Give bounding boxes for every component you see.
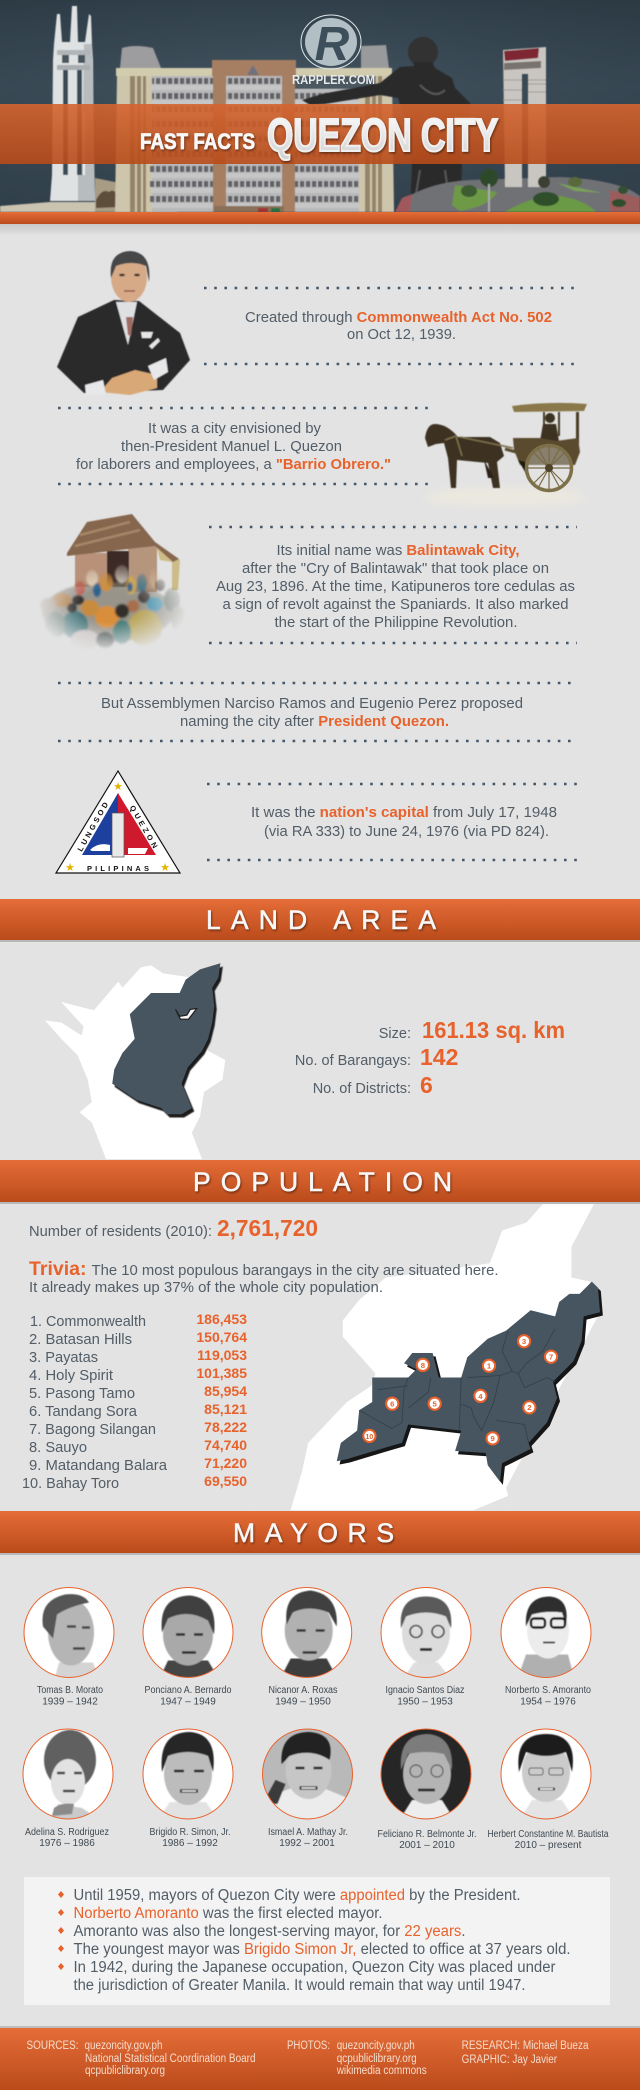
section banner: Mayors: MAYORS <box>233 1518 394 1548</box>
icon: Quezon City seal: LUNGSOD <box>76 800 110 853</box>
mayor names and terms: 2001 – 2010 <box>399 1840 455 1851</box>
text: Commonwealth Act <box>245 310 552 343</box>
footer: research and graphic credits: GRAPHIC: Jay Javier <box>462 2054 557 2066</box>
map markers 1–10: 4 <box>478 1392 483 1401</box>
text: Balintawak City: a sign of revolt against the Spaniards. It also marked <box>222 597 568 613</box>
text: nation's capital: It was the nation's capital from July 17, 1948 <box>251 805 557 821</box>
mayor names and terms: Feliciano R. Belmonte Jr. <box>378 1829 476 1840</box>
text: Barrio Obrero: It was a city envisioned by <box>148 421 322 437</box>
footer: sources: National Statistical Coordination Board <box>85 2053 256 2065</box>
list: top ten barangays: 85,121 <box>204 1401 247 1417</box>
map markers 1–10 <box>363 1335 557 1444</box>
icon: Quezon City seal: QUEZON <box>128 804 160 850</box>
mayor names and terms: 1986 – 1992 <box>162 1838 218 1849</box>
text: Balintawak City <box>216 543 575 631</box>
mayor portrait: Morato <box>24 1588 114 1678</box>
list: top ten barangays: 119,053 <box>197 1347 247 1363</box>
list: top ten barangays: 5. Pasong Tamo <box>29 1386 135 1402</box>
illustration: Manuel L. Quezon portrait <box>57 251 190 395</box>
list: top ten barangays: 69,550 <box>204 1473 247 1489</box>
mayor names and terms: 1950 – 1953 <box>397 1696 453 1708</box>
list: top ten barangays: 1. Commonwealth <box>30 1314 146 1330</box>
footer: photos: qcpubliclibrary.org <box>337 2053 417 2065</box>
footer: photos: PHOTOS: <box>287 2040 330 2052</box>
footer: research and graphic credits <box>462 2040 589 2066</box>
icon: Quezon City seal: ★ <box>113 781 123 793</box>
list: top ten barangays: 78,222 <box>204 1419 247 1435</box>
mayor portrait: Belmonte <box>381 1729 471 1819</box>
icon: Quezon City seal: ★ <box>160 862 170 874</box>
section banner: Population: POPULATION <box>193 1167 452 1197</box>
footer: photos: quezoncity.gov.ph <box>337 2040 415 2052</box>
text: trivia: It already makes up 37% of the whole city population. <box>29 1280 383 1296</box>
map markers 1–10: 6 <box>390 1400 395 1409</box>
land area stats: 6 <box>420 1072 433 1098</box>
mayor names and terms: 1976 – 1986 <box>39 1838 95 1849</box>
text: Balintawak City: Aug 23, 1896. At the time, Katipuneros tore cedulas as <box>216 579 575 595</box>
section banner: Population <box>0 1160 640 1204</box>
mayor names and terms: 1947 – 1949 <box>160 1696 216 1708</box>
land area stats: No. of Districts: <box>313 1081 411 1097</box>
text: Commonwealth Act: on Oct 12, 1939. <box>347 327 456 343</box>
panel: mayor trivia: Until 1959, mayors of Quezon City were appointed by the President. <box>74 1887 520 1904</box>
list: top ten barangays: 9. Matandang Balara <box>29 1458 168 1474</box>
land area stats: Size: <box>379 1026 411 1042</box>
header: skyline banner <box>0 0 640 212</box>
map: surrounding Metro Manila <box>45 965 225 1159</box>
mayor names and terms: Nicanor A. Roxas <box>268 1685 338 1696</box>
orange title band <box>0 104 640 164</box>
map: top ten barangays <box>337 1282 603 1485</box>
list: top ten barangays: 2. Batasan Hills <box>29 1332 132 1348</box>
panel: mayor trivia: The youngest mayor was Brigido Simon Jr, elected to office at 37 years old. <box>74 1941 570 1958</box>
list: top ten barangays: 71,220 <box>204 1455 247 1471</box>
map: Quezon City land area <box>45 963 225 1159</box>
list: top ten barangays: 150,764 <box>196 1329 247 1345</box>
map markers 1–10: 8 <box>421 1361 426 1370</box>
footer: photos: wikimedia commons <box>336 2065 427 2077</box>
illustration: Quezon Memorial Circle tower <box>0 6 178 212</box>
footer: sources: SOURCES: <box>26 2040 78 2052</box>
list: top ten barangays <box>22 1311 247 1492</box>
panel: mayor trivia: Amoranto was also the longest-serving mayor, for 22 years. <box>74 1923 466 1940</box>
list: top ten barangays: 4. Holy Spirit <box>29 1368 113 1384</box>
map: city outline <box>112 963 223 1118</box>
icon: Quezon City seal: PILIPINAS <box>87 864 149 873</box>
land area stats: 161.13 sq. km <box>422 1017 565 1043</box>
mayor names and terms: Herbert Constantine M. Bautista <box>488 1829 609 1840</box>
text: nation's capital: (via RA 333) to June 24, 1976 (via PD 824). <box>264 824 549 840</box>
text: trivia: Trivia: <box>29 1258 86 1280</box>
text: Commonwealth Act: Created through Commonwealth Act No. 502 <box>245 310 552 326</box>
mayor names and terms: 1992 – 2001 <box>279 1838 335 1849</box>
map markers 1–10: 5 <box>433 1400 438 1409</box>
list: top ten barangays: 3. Payatas <box>29 1350 98 1366</box>
text: number of residents: 2,761,720 <box>217 1215 318 1241</box>
mayor names and terms: 2010 – present <box>515 1840 582 1851</box>
illustration: Balintawak hut and crowd <box>40 514 185 650</box>
footer: photos <box>287 2040 427 2077</box>
mayor portrait: Bernardo <box>143 1588 233 1678</box>
land area stats <box>295 1017 565 1098</box>
section banner: Land Area <box>0 899 640 942</box>
mayor names and terms: Tomas B. Morato <box>37 1685 103 1696</box>
title: Quezon City: QUEZON CITY <box>267 109 498 161</box>
text: Barrio Obrero: for laborers and employees, a "Barrio Obrero." <box>76 457 391 473</box>
list: top ten barangays: 186,453 <box>196 1311 247 1327</box>
text: number of residents: Number of residents (2010): <box>29 1224 212 1240</box>
illustration: Quezon Circle arch and gardens <box>395 47 640 212</box>
footer: credits <box>0 2026 640 2090</box>
footer: research and graphic credits: RESEARCH: Michael Bueza <box>462 2040 589 2052</box>
icon: Quezon City seal <box>56 771 180 874</box>
text: naming after President Quezon: naming the city after President Quezon. <box>180 714 449 730</box>
text: Barrio Obrero: then-President Manuel L. Quezon <box>121 439 342 455</box>
icon: Rappler logo: R <box>315 18 350 71</box>
text: naming after President Quezon <box>101 696 523 730</box>
text: Balintawak City: Its initial name was Balintawak City, <box>276 543 520 559</box>
mayor names and terms: Adelina S. Rodriguez <box>25 1827 109 1838</box>
icon: Rappler logo <box>292 15 375 87</box>
mayor names and terms: Norberto S. Amoranto <box>505 1685 591 1696</box>
map markers 1–10: 7 <box>549 1353 553 1362</box>
text: nation's capital <box>251 805 557 840</box>
map markers 1–10: 1 <box>487 1362 492 1371</box>
list: top ten barangays: 101,385 <box>196 1365 247 1381</box>
panel: mayor trivia <box>24 1877 610 2005</box>
mayor portrait: Diaz <box>381 1588 471 1678</box>
mayor names and terms: Ignacio Santos Diaz <box>386 1685 464 1696</box>
map markers 1–10: 3 <box>522 1337 527 1346</box>
text: Balintawak City: the start of the Philippine Revolution. <box>274 615 518 631</box>
mayor names and terms: Ponciano A. Bernardo <box>144 1685 232 1696</box>
list: top ten barangays: 6. Tandang Sora <box>29 1404 138 1420</box>
map markers 1–10: 9 <box>490 1434 495 1443</box>
title: Fast Facts: FAST FACTS <box>140 129 255 154</box>
panel: mayor trivia: Norberto Amoranto was the first elected mayor. <box>74 1905 382 1922</box>
mayor portrait: Rodriguez <box>23 1729 113 1819</box>
header bottom bar <box>0 212 640 224</box>
text: trivia <box>29 1258 498 1296</box>
list: top ten barangays: 85,954 <box>204 1383 247 1399</box>
map: barangays on the city map <box>291 1204 603 1510</box>
section banner: Mayors <box>0 1511 640 1555</box>
text: number of residents <box>29 1215 318 1241</box>
icon: Rappler logo: RAPPLER.COM <box>292 72 375 87</box>
illustration: Quezon City Hall <box>115 45 394 212</box>
mayor names and terms: 1939 – 1942 <box>42 1696 98 1708</box>
list: top ten barangays: 8. Sauyo <box>29 1440 87 1456</box>
text: naming after President Quezon: But Assemblymen Narciso Ramos and Eugenio Perez proposed <box>101 696 523 712</box>
text: trivia: The 10 most populous barangays in the city are situated here. <box>92 1263 498 1279</box>
panel: mayor trivia: the jurisdiction of Greater Manila. It would remain that way until 1947. <box>74 1977 526 1994</box>
mayor names and terms: Brigido R. Simon, Jr. <box>150 1827 230 1838</box>
text: Balintawak City: after the "Cry of Balintawak" that took place on <box>242 561 549 577</box>
list: top ten barangays: 74,740 <box>204 1437 247 1453</box>
map markers 1–10: 2 <box>527 1403 532 1412</box>
footer: sources: qcpubliclibrary.org <box>85 2065 165 2077</box>
section banner: Land Area: LAND AREA <box>206 905 436 935</box>
mayor portrait: Simon <box>143 1729 233 1819</box>
mayor names and terms: 1949 – 1950 <box>275 1696 331 1708</box>
dotted rule <box>204 287 577 289</box>
text: Barrio Obrero <box>76 421 391 473</box>
mayor portrait: Amoranto <box>501 1588 591 1678</box>
panel: mayor trivia: In 1942, during the Japanese occupation, Quezon City was placed under <box>74 1959 556 1976</box>
land area stats: 142 <box>420 1044 458 1070</box>
mayor names and terms: 1954 – 1976 <box>520 1696 576 1708</box>
illustration: kalesa horse carriage <box>425 403 587 507</box>
map: surrounding land <box>291 1204 600 1510</box>
illustration: statue <box>302 37 470 212</box>
map markers 1–10: 10 <box>366 1434 373 1441</box>
icon: Quezon City seal: ★ <box>65 862 75 874</box>
list: top ten barangays: 10. Bahay Toro <box>22 1476 119 1492</box>
mayor portrait: Bautista <box>501 1729 591 1819</box>
mayor portrait: Mathay <box>262 1729 352 1819</box>
footer: sources <box>26 2040 256 2077</box>
list: top ten barangays: 7. Bagong Silangan <box>29 1422 156 1438</box>
mayor names and terms: Ismael A. Mathay Jr. <box>268 1827 348 1838</box>
land area stats: No. of Barangays: <box>295 1053 411 1069</box>
mayor names and terms <box>25 1685 609 1851</box>
footer: sources: quezoncity.gov.ph <box>84 2040 162 2052</box>
mayor portrait: Roxas <box>262 1588 352 1678</box>
